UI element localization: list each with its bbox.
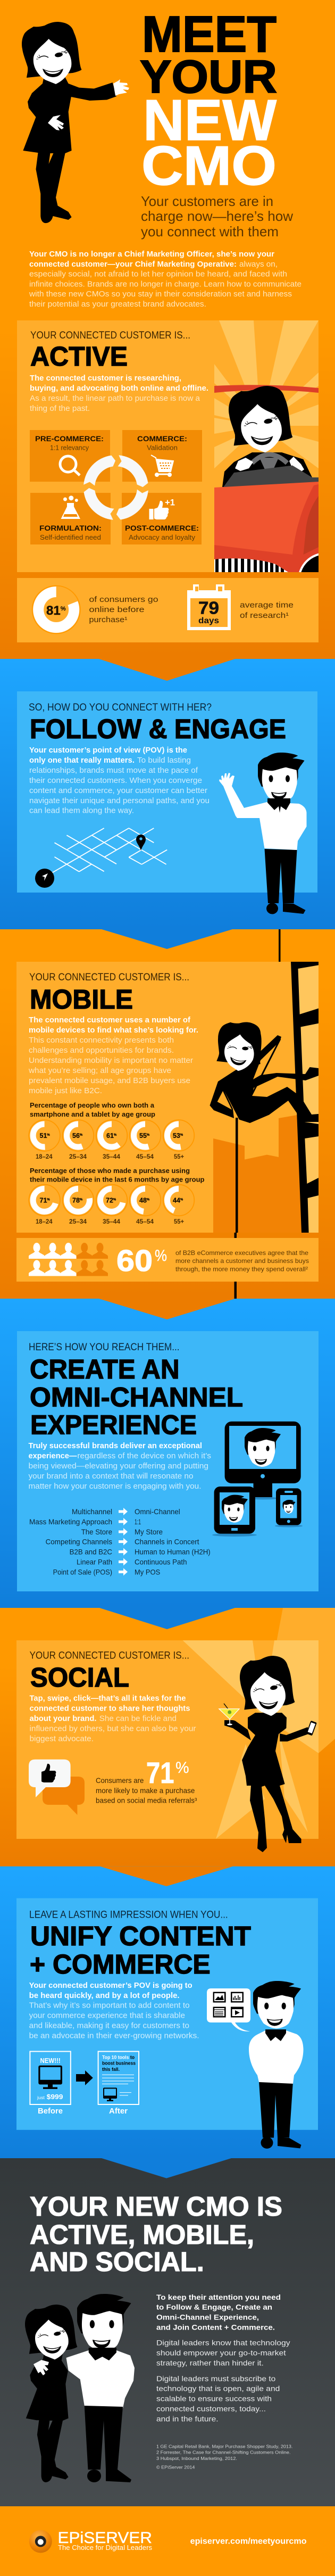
body text: To build lasting [137,756,191,765]
chart: mobile purchase donuts: 72 [106,1196,113,1204]
panel: follow and engage [17,691,317,893]
body text: Your customer’s point of view (POV) is the [29,746,187,755]
box: commerce: Validation [147,444,178,451]
subtitle: charge now—here’s how [141,208,293,224]
stat: 60 percent: 60 [116,1244,153,1278]
title: NEW [143,88,277,153]
footnotes: © EPiServer 2014 [156,2464,195,2470]
stat text: consumers online: online before [89,606,145,614]
footnotes [156,2443,292,2470]
body text: mobile just like B2C. [29,1087,102,1095]
conclusion lead text: and Join Content + Commerce. [156,2323,275,2331]
heading: create an omni-channel experience: EXPERIENCE [30,1409,197,1440]
table: from and to list: B2B and B2C [70,1548,112,1556]
body text [28,1016,198,1095]
chart heading: own both: smartphone and a tablet by age group [30,1111,155,1118]
arrow: section chevron [99,1299,235,1319]
footer [0,2506,335,2576]
rope: lower [234,1233,237,1299]
panel: active [17,320,319,572]
speech bubble with content icons [207,1988,250,2032]
chart: smartphone and tablet donuts: 61 [106,1132,114,1140]
body text: prevalent mobile usage, and B2B buyers use [29,1077,190,1085]
body text [30,1695,196,1744]
illustration: devices with faces [212,1422,303,1537]
stat: 60 percent [116,1244,167,1278]
chart: smartphone and tablet donuts: 25–34 [69,1154,87,1160]
stat text: research time: average time [240,601,294,610]
stat text: research time: of research¹ [240,612,289,620]
heading: SO, HOW DO YOU CONNECT WITH HER? [29,701,212,713]
section background: blue unify [0,1867,335,2158]
conclusion paragraph one: should empower your go-to-market [156,2349,286,2357]
chart: mobile purchase donuts: % [80,1199,83,1202]
body text: be heard quickly, and by a lot of people. [29,1992,180,2000]
chart: smartphone and tablet donuts: 55 [139,1132,147,1140]
body text: buying, and advocating both online and offline. [30,384,208,393]
chart: mobile purchase donuts [29,1185,194,1225]
arrow: section chevron [99,659,235,681]
box: post-commerce: +1 [165,497,175,508]
table: from and to list: Human to Human (H2H) [135,1548,211,1556]
building silhouette [213,1115,302,1233]
conclusion paragraph one [156,2339,290,2367]
decorative background ray [263,1608,335,1753]
body text: As a result, the linear path to purchase is now a [30,394,200,403]
body text: regardless of the device on which it’s [77,1452,211,1460]
body text: being viewed—elevating your offering and putting [29,1462,208,1471]
subtitle: you connect with them [141,224,279,240]
body text: and likeable, making it easy for customers to [29,2022,189,2030]
body text: mobile devices to find what she’s looking for. [29,1026,198,1035]
heading: unify content + commerce [30,1921,251,1979]
chart: smartphone and tablet donuts: 18–24 [36,1154,53,1160]
stat: 71 percent: Consumers are [96,1776,144,1785]
conclusion lead text: Omni-Channel Experience, [156,2313,259,2322]
body text: biggest advocate. [30,1735,94,1744]
chart: smartphone and tablet donuts: 35–44 [103,1154,121,1160]
chart: smartphone and tablet donuts: % [180,1134,183,1137]
icon: calendar 79 days [187,584,231,630]
chart: mobile purchase donuts: 18–24 [36,1219,53,1225]
stat text: consumers online [89,596,158,624]
illustration: woman presenting [22,22,129,223]
body text: their connected customers. When you converge [29,777,202,785]
body text: Tap, swipe, click—that’s all it takes for the [30,1695,186,1703]
heading: unify content + commerce: + COMMERCE [30,1949,211,1979]
heading: YOUR CONNECTED CUSTOMER IS... [30,1650,189,1662]
arrow: section chevron [99,1608,235,1629]
body text: challenges and opportunities for brands. [29,1046,174,1055]
body text: your commerce experience that is sharable [29,2012,185,2020]
logo ball [29,2530,52,2553]
title: YOUR [140,51,277,103]
intro paragraph [29,250,302,309]
heading: YOUR CONNECTED CUSTOMER IS... [29,971,189,983]
heading: mobile: MOBILE [30,984,133,1014]
chart: smartphone and tablet donuts: 45–54 [136,1154,154,1160]
box: pre-commerce: PRE-COMMERCE: [35,435,104,443]
chart: smartphone and tablet donuts: % [114,1134,117,1137]
building ladder and windows [291,962,319,1233]
conclusion paragraph two: Digital leaders must subscribe to [156,2374,276,2383]
body text: what you’re selling; all age groups have [28,1067,171,1075]
body text: thing of the past. [30,404,90,413]
box: formulation: FORMULATION: [39,524,102,532]
conclusion paragraph one: strategy, rather than hinder it. [156,2359,264,2367]
stat: 71 percent: 71 [146,1756,174,1789]
table: from and to list: 1:1 [135,1517,141,1526]
stat: 71 percent: based on social media referrals³ [96,1796,197,1805]
intro paragraph: infinite choices. Brands are no longer in charge. Learn how to communicate [29,280,302,288]
light rays [183,1640,319,1839]
card: after: boost business [102,2061,136,2066]
stat: 71 percent [96,1756,197,1805]
stat: 60 percent: % [155,1247,167,1265]
logo wordmark: The Choice for Digital Leaders [58,2544,152,2552]
logo wordmark: EPiSERVER [57,2529,152,2547]
chart heading: purchase on mobile [30,1167,205,1184]
table: from and to list: Mass Marketing Approach [29,1517,112,1526]
heading: YOUR CONNECTED CUSTOMER IS... [30,329,190,341]
conclusion paragraph two: scalable to ensure success with [156,2394,272,2402]
chart: mobile purchase donuts: 45–54 [136,1219,154,1225]
stat: 71 percent: % [175,1759,189,1777]
icons: people [29,1243,108,1276]
card: before: just [37,2095,45,2100]
body text: The connected customer is researching, [30,374,181,383]
table: from and to list: Point of Sale (POS) [53,1567,112,1576]
icon: calendar 79 days: 79 [198,598,219,617]
conclusion lead text [156,2293,281,2331]
card: after: this fall. [102,2067,120,2072]
box: post-commerce [122,493,202,544]
body text: about your brand. [30,1715,97,1723]
chart: smartphone and tablet donuts: 53 [173,1132,180,1140]
panel: omni-channel [17,1331,319,1591]
table: from and to list: Multichannel [72,1507,112,1516]
illustration: woman climbing rope [210,1017,319,1233]
chart: mobile purchase donuts: % [180,1199,183,1202]
table: from and to list: The Store [81,1528,112,1536]
intro paragraph: connected customer—your Chief Marketing Operative: [29,260,237,269]
stat text: consumers online: purchase¹ [89,616,128,624]
body text: Your connected customer’s POV is going to [29,1981,192,1990]
panel: active stats [17,578,319,642]
intro paragraph: always on, [239,260,278,269]
body text: only one that really matters. [29,756,135,765]
subtitle [141,193,293,240]
body text: She can be fickle and [99,1715,177,1723]
section background: orange social [0,1608,335,1867]
conclusion lead text: To keep their attention you need [156,2293,281,2301]
section background: blue omni-channel [0,1299,335,1608]
conclusion paragraph two [156,2374,280,2423]
section background: blue follow and engage [0,659,335,929]
title [140,6,277,197]
heading: your new cmo [30,2191,282,2277]
card: before [30,2051,71,2104]
panel: mobile [16,962,319,1233]
heading: your new cmo: YOUR NEW CMO IS [30,2191,282,2222]
heading: create an omni-channel experience [30,1354,243,1440]
heading: create an omni-channel experience: OMNI-CHANNEL [30,1382,243,1413]
intro paragraph: especially social, not afraid to let her opinion be heard, and faced with [29,270,287,279]
arrow: section chevron [100,1867,233,1886]
heading: social: SOCIAL [30,1662,129,1692]
illustration: woman with martini and phone [219,1656,317,1852]
panel: unify content and commerce [16,1898,318,2130]
arrow: section chevron [102,2158,231,2178]
body text: experience— [29,1452,77,1460]
chart: mobile purchase donuts: % [113,1199,116,1202]
chart: 81 percent donut: % [61,606,66,612]
body text: The connected customer uses a number of [29,1016,190,1025]
icon: calendar 79 days: days [198,616,219,625]
label: after: After [109,2107,128,2116]
box: formulation [30,493,111,544]
box: commerce [122,430,202,482]
stat text: consumers online: of consumers go [89,596,158,604]
chart heading: own both [30,1102,155,1118]
chart: mobile purchase donuts: % [147,1199,150,1202]
box: post-commerce: POST-COMMERCE: [125,524,199,532]
arrow: before to after [76,2070,93,2085]
arrow: section chevron [102,929,232,949]
conclusion lead text: to Follow & Engage, Create an [156,2303,272,2311]
body text [29,1442,211,1491]
chart: mobile purchase donuts: 35–44 [103,1219,121,1225]
stat text: through, the more money they spend overall² [175,1265,308,1273]
body text: That’s why it’s so important to add content to [29,2002,190,2010]
box: commerce: COMMERCE: [137,435,187,443]
conclusion paragraph two: technology that is open, agile and [156,2384,280,2393]
panel: social [16,1640,319,1839]
icon: street map with route [35,828,167,888]
chart: mobile purchase donuts: 71 [39,1196,47,1204]
icon: speech bubbles with thumb up [29,1760,85,1815]
label: before: Before [38,2107,63,2116]
card: after: Top 10 tools to [102,2054,135,2060]
panel: 60 percent stat [16,1238,319,1282]
heading: LEAVE A LASTING IMPRESSION WHEN YOU... [29,1909,228,1920]
illustration: man waving [219,753,306,914]
box: pre-commerce [30,430,110,482]
stat text [175,1249,309,1273]
table: from and to list: Linear Path [77,1557,112,1566]
section background: orange mobile [0,929,335,1299]
box: post-commerce: Advocacy and loyalty [129,534,196,541]
body text: relationships, brands must move at the pace of [29,766,198,775]
url: episerver.com/meetyourcmo [190,2537,307,2546]
rope: upper [279,929,281,1039]
illustration: woman driving a car with sun rays [214,320,319,572]
heading: active: ACTIVE [30,341,128,371]
body text: connected customer to share her thoughts [30,1705,190,1713]
chart: mobile purchase donuts: 55+ [174,1219,184,1225]
body text: influenced by others, but she can also be your [30,1725,196,1733]
title: CMO [141,135,277,197]
icon: cycle arrows [83,455,148,520]
body text: matter how your customer is engaging with you. [29,1482,201,1491]
card: before: NEW!!! [40,2057,61,2065]
table: from and to list [29,1507,211,1576]
body text [29,746,210,815]
footnotes: 1 GE Capital Retail Bank, Major Purchase Shopper Study, 2013. [156,2443,292,2449]
footnotes: 2 Forrester, The Case for Channel-Shifting Customers Online. [156,2450,290,2455]
stat: 71 percent: more likely to make a purchase [96,1786,195,1795]
chart heading: purchase on mobile: their mobile device in the last 6 months by age group [30,1176,205,1184]
chart heading: purchase on mobile: Percentage of those who made a purchase using [30,1167,190,1175]
chart: mobile purchase donuts: % [47,1199,50,1202]
card: before: $999 [47,2093,63,2101]
conclusion paragraph two: connected customers, today... [156,2404,266,2413]
conclusion paragraph one: Digital leaders know that technology [156,2339,290,2347]
box: formulation: Self-identified need [40,534,101,541]
chart: smartphone and tablet donuts: % [47,1134,50,1137]
heading: your new cmo: AND SOCIAL. [30,2247,204,2277]
chart: 81 percent donut: 81 [46,604,61,618]
heading: create an omni-channel experience: CREATE AN [30,1354,180,1384]
table: from and to list: Channels in Concert [135,1538,199,1546]
intro paragraph: Your CMO is no longer a Chief Marketing Officer, she’s now your [29,250,274,259]
section background: dark conclusion [0,2158,335,2506]
table: from and to list: My Store [135,1528,163,1536]
chart: mobile purchase donuts: 44 [173,1196,180,1204]
card: after [98,2051,139,2104]
intro paragraph: their potential as your greatest brand advocates. [29,300,206,309]
stat text: research time [240,601,294,620]
title: MEET [142,6,277,63]
table: from and to list: My POS [135,1567,160,1576]
table: from and to list: Competing Channels [46,1538,112,1546]
stat text: of B2B eCommerce executives agree that the [175,1249,308,1257]
chart: smartphone and tablet donuts: % [80,1134,83,1137]
body text: be an advocate in their ever-growing networks. [29,2032,199,2041]
body text: This constant connectivity presents both [29,1036,174,1045]
chart: mobile purchase donuts: 25–34 [69,1219,87,1225]
body text: Understanding mobility is important no matter [29,1056,193,1065]
section background: orange intro and active [0,0,335,659]
body text: Truly successful brands deliver an exceptional [29,1442,202,1450]
stat text: more channels a customer and business buys [175,1257,309,1265]
chart heading: own both: Percentage of people who own both a [30,1102,155,1109]
footnotes: 3 Hubspot, Inbound Marketing, 2012. [156,2456,237,2461]
body text [30,374,208,413]
heading: HERE’S HOW YOU REACH THEM... [29,1341,180,1353]
body text: navigate their unique and personal paths, and you [29,797,210,805]
illustration: man with content speech bubble [207,1981,303,2149]
chart: smartphone and tablet donuts: % [147,1134,150,1137]
box: pre-commerce: 1:1 relevancy [50,444,89,451]
intro paragraph: with these new CMOs so you stay in their consideration set and harness [29,290,292,299]
heading: your new cmo: ACTIVE, MOBILE, [30,2219,254,2250]
chart: smartphone and tablet donuts: 55+ [174,1154,184,1160]
body text: content and commerce, your customer can better [29,787,207,795]
body text [29,1981,199,2041]
body text: your brand into a context that will resonate no [29,1472,194,1481]
table: from and to list: Omni-Channel [135,1507,180,1516]
heading: follow and engage: FOLLOW & ENGAGE [30,714,286,744]
chart: mobile purchase donuts: 48 [139,1196,147,1204]
table: from and to list: Continuous Path [135,1557,187,1566]
illustration: woman and man together [25,2294,135,2482]
chart: smartphone and tablet donuts: 56 [72,1132,80,1140]
chart: mobile purchase donuts: 78 [72,1196,80,1204]
subtitle: Your customers are in [141,193,273,209]
heading: unify content + commerce: UNIFY CONTENT [30,1921,251,1951]
chart: smartphone and tablet donuts: 51 [39,1132,47,1140]
body text: can lead them along the way. [29,807,134,815]
chart: 81 percent donut [32,585,80,633]
conclusion paragraph two: and in the future. [156,2414,219,2423]
chart: smartphone and tablet donuts [29,1120,194,1160]
